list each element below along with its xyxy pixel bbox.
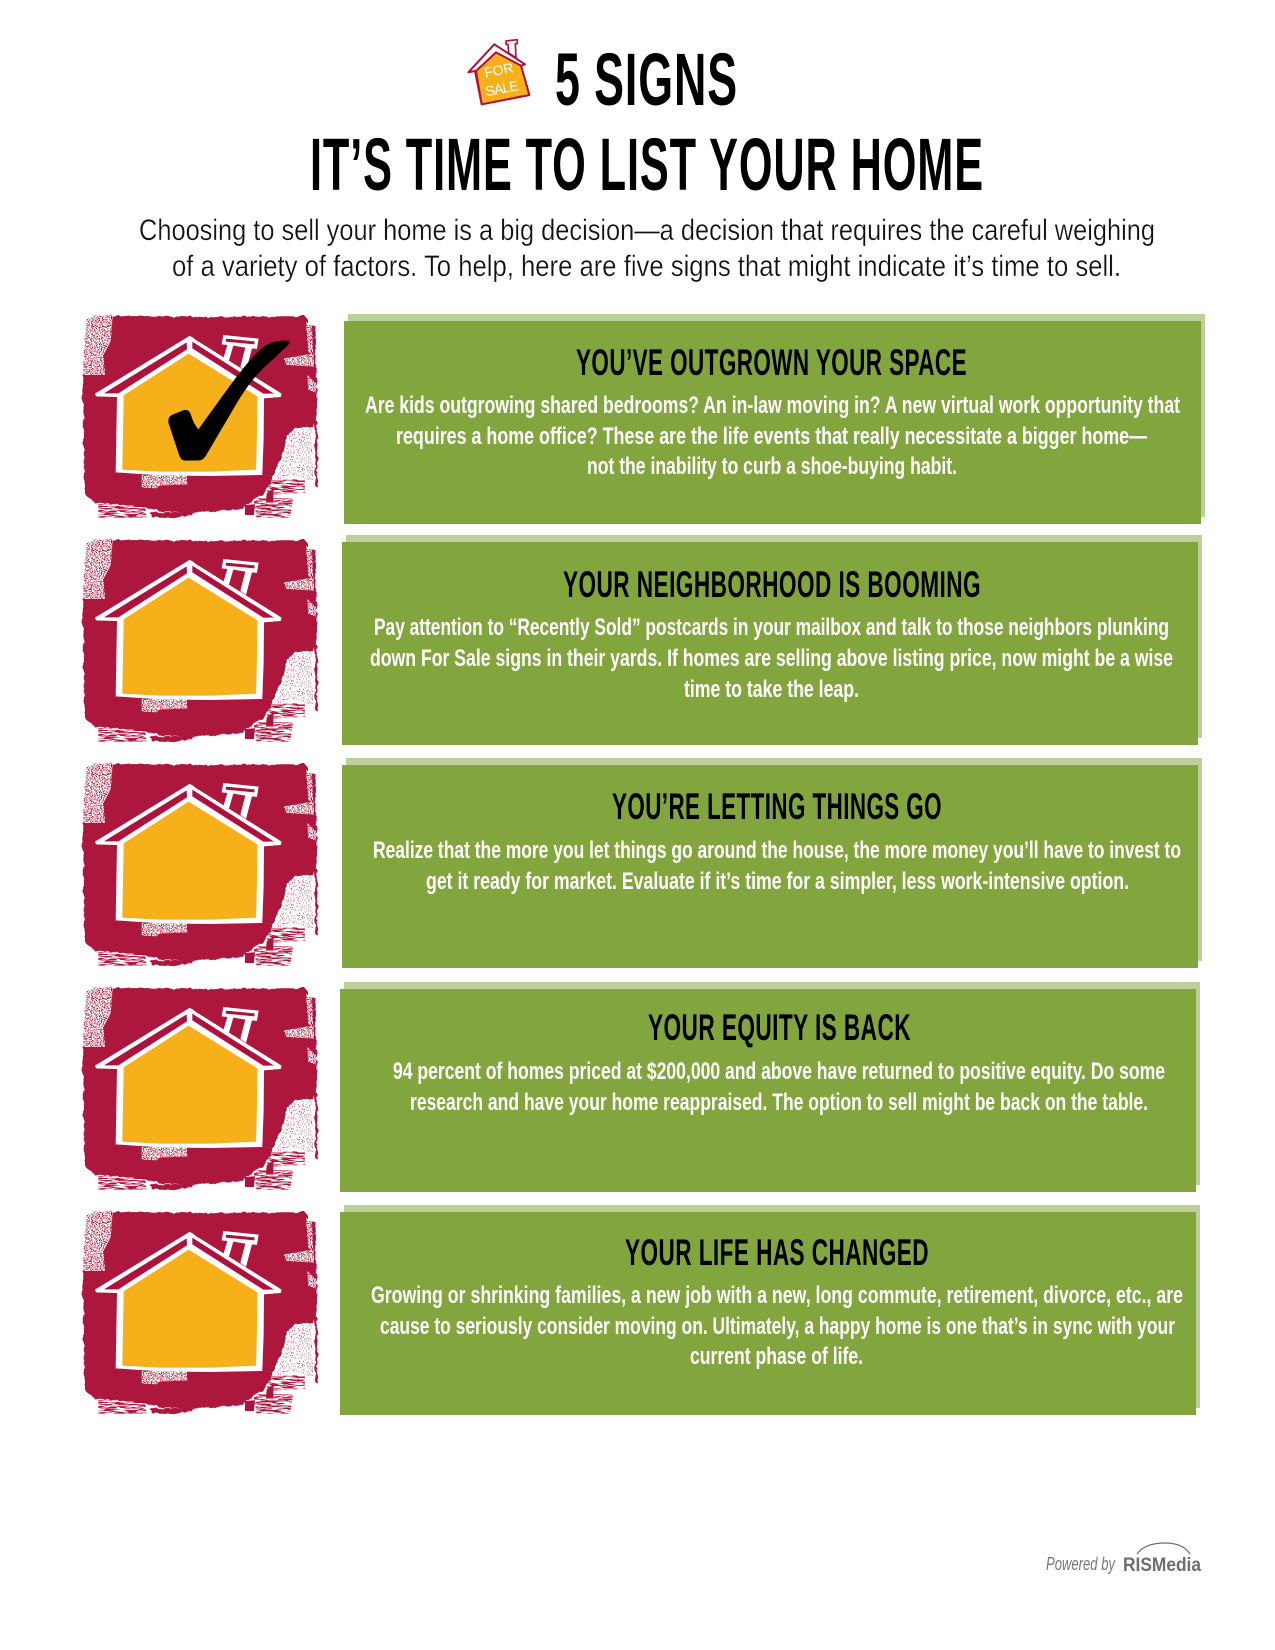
heading: YOUR LIFE HAS CHANGED — [625, 1232, 929, 1273]
intro text — [139, 214, 1155, 283]
heading: YOUR NEIGHBORHOOD IS BOOMING — [563, 564, 981, 605]
footer: powered by RISMedia logo: Powered by — [1046, 1554, 1116, 1574]
body text — [373, 837, 1181, 895]
panel: sign 4 icon, house — [82, 987, 318, 1190]
panel: sign 3 — [342, 758, 1202, 968]
heading: YOU’RE LETTING THINGS GO — [612, 786, 942, 827]
body text — [371, 1282, 1183, 1370]
body text: time to take the leap. — [684, 676, 859, 703]
panel: sign 2 icon, house — [82, 539, 318, 742]
body text — [365, 392, 1180, 480]
title line 1: 5 SIGNS — [555, 38, 738, 121]
panel: sign 4 — [340, 982, 1200, 1192]
body text: current phase of life. — [690, 1343, 863, 1370]
icon: check mark — [168, 341, 289, 461]
panel: sign 1 — [344, 314, 1205, 524]
footer: powered by RISMedia logo: RISMedia — [1123, 1555, 1201, 1576]
title — [310, 38, 984, 206]
icon: for sale house — [468, 40, 529, 104]
body text: not the inability to curb a shoe-buying habit. — [587, 453, 957, 480]
heading: YOUR EQUITY IS BACK — [648, 1007, 911, 1048]
panel: sign 2 — [342, 535, 1202, 745]
footer: powered by RISMedia logo — [1046, 1543, 1201, 1576]
icon: for sale house: SALE — [484, 77, 520, 99]
panel: sign 5 — [340, 1205, 1200, 1415]
icon: for sale house: FOR — [483, 59, 515, 81]
body text — [370, 614, 1173, 703]
heading: YOU’VE OUTGROWN YOUR SPACE — [576, 342, 967, 383]
intro text: of a variety of factors. To help, here are five signs that might indicate it’s time to sell. — [172, 250, 1121, 283]
panel: sign 5 icon, house — [82, 1211, 318, 1414]
panel: sign 1 icon, house with check mark — [82, 315, 318, 518]
panel: sign 3 icon, house — [82, 763, 318, 966]
body text — [393, 1058, 1165, 1116]
